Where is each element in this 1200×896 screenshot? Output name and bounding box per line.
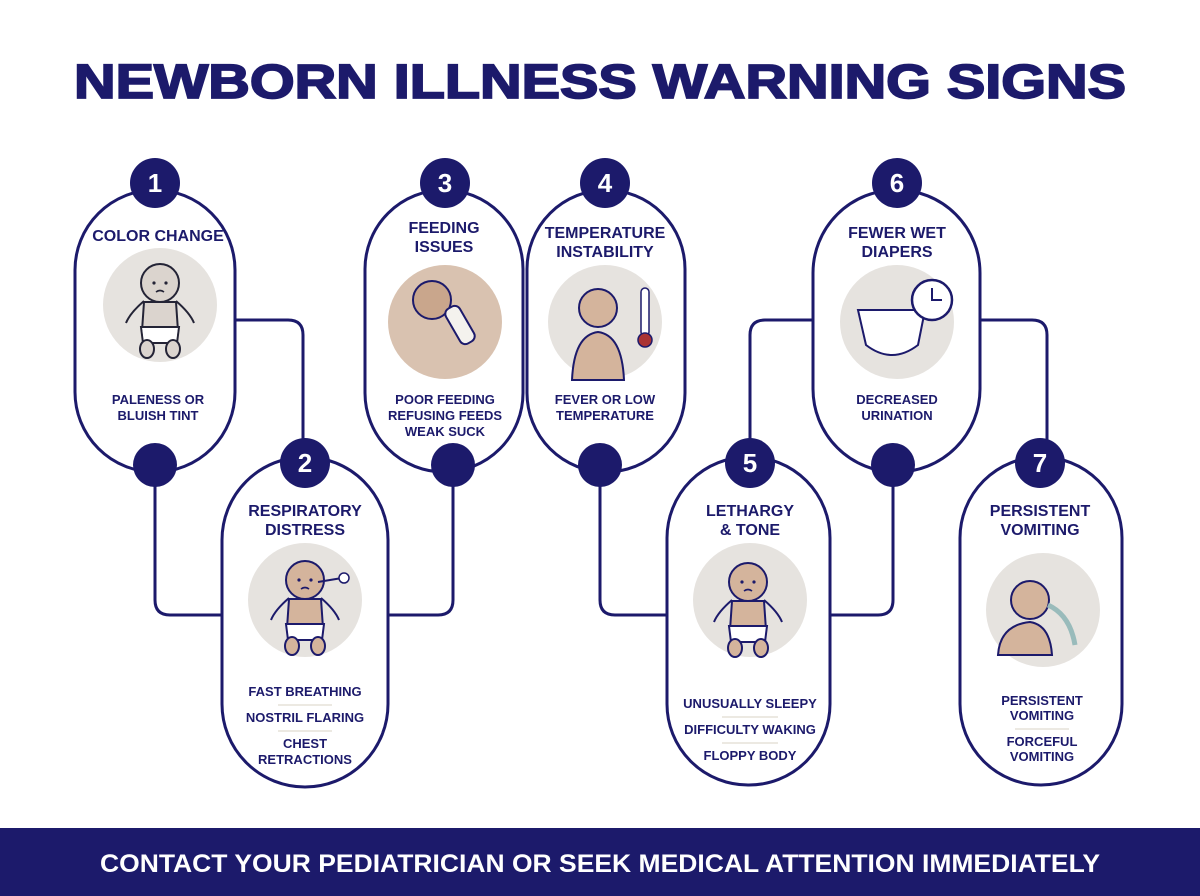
card 3: feeding issues: ISSUES	[415, 239, 474, 256]
card 5: lethargy: DIFFICULTY WAKING	[684, 722, 816, 737]
card 5: lethargy: FLOPPY BODY	[704, 748, 797, 763]
card 7: persistent vomiting: FORCEFUL	[1007, 734, 1077, 749]
card 7: persistent vomiting: VOMITING	[1010, 708, 1074, 723]
icon: feeding baby	[388, 265, 502, 379]
number badges: 7	[1033, 448, 1047, 478]
footer banner: CONTACT YOUR PEDIATRICIAN OR SEEK MEDICAL ATTENTION IMMEDIATELY	[100, 850, 1100, 878]
connectors	[155, 320, 1047, 615]
card 1: color change: BLUISH TINT	[118, 408, 198, 423]
card 2: respiratory distress: RETRACTIONS	[258, 752, 352, 767]
card 7: persistent vomiting: VOMITING	[1010, 749, 1074, 764]
card 7: persistent vomiting: VOMITING	[1000, 522, 1080, 539]
card 3: feeding issues: REFUSING FEEDS	[388, 408, 502, 423]
number badges: 2	[298, 448, 312, 478]
card 4: temperature instability: INSTABILITY	[556, 244, 654, 261]
card 6: fewer wet diapers	[813, 190, 980, 472]
number badges: 5	[743, 448, 757, 478]
icon: vomiting baby	[986, 553, 1100, 667]
number badges: 3	[438, 168, 452, 198]
connector dots	[133, 443, 915, 487]
card 2: respiratory distress: FAST BREATHING	[248, 684, 362, 699]
footer banner	[0, 828, 1200, 896]
number badges: 4	[598, 168, 613, 198]
card 7: persistent vomiting: PERSISTENT	[990, 503, 1090, 520]
card 5: lethargy: & TONE	[720, 522, 780, 539]
card 2: respiratory distress	[222, 457, 388, 787]
number badges: 1	[148, 168, 162, 198]
card 3: feeding issues: WEAK SUCK	[405, 424, 486, 439]
card 6: fewer wet diapers: DIAPERS	[861, 244, 933, 261]
icon: sleepy baby	[693, 543, 807, 657]
card 7: persistent vomiting	[960, 457, 1122, 785]
card 2: respiratory distress: DISTRESS	[265, 522, 345, 539]
number badges	[130, 158, 1065, 488]
card 6: fewer wet diapers: URINATION	[861, 408, 933, 423]
card 2: respiratory distress: CHEST	[283, 736, 327, 751]
card 5: lethargy: UNUSUALLY SLEEPY	[683, 696, 817, 711]
icon: breathing baby	[248, 543, 362, 657]
card 1: color change: COLOR CHANGE	[92, 228, 224, 245]
card 1: color change	[75, 190, 235, 472]
card 7: persistent vomiting: PERSISTENT	[1001, 693, 1083, 708]
card 4: temperature instability: TEMPERATURE	[556, 408, 654, 423]
card 3: feeding issues	[365, 190, 523, 472]
card 4: temperature instability	[527, 190, 685, 472]
card 2: respiratory distress: RESPIRATORY	[248, 503, 362, 520]
card 2: respiratory distress: NOSTRIL FLARING	[246, 710, 364, 725]
number badges: 6	[890, 168, 904, 198]
card 5: lethargy: LETHARGY	[706, 503, 794, 520]
card 6: fewer wet diapers: FEWER WET	[848, 225, 946, 242]
card 4: temperature instability: TEMPERATURE	[545, 225, 666, 242]
icon: diaper with clock	[840, 265, 954, 379]
card 1: color change: PALENESS OR	[112, 392, 205, 407]
title: NEWBORN ILLNESS WARNING SIGNS	[74, 56, 1126, 109]
card 3: feeding issues: FEEDING	[408, 220, 480, 237]
card 6: fewer wet diapers: DECREASED	[856, 392, 938, 407]
card 5: lethargy	[667, 457, 830, 785]
card 3: feeding issues: POOR FEEDING	[395, 392, 495, 407]
icon: baby with thermometer	[548, 265, 662, 380]
icon: pale baby	[103, 248, 217, 362]
card 4: temperature instability: FEVER OR LOW	[555, 392, 656, 407]
